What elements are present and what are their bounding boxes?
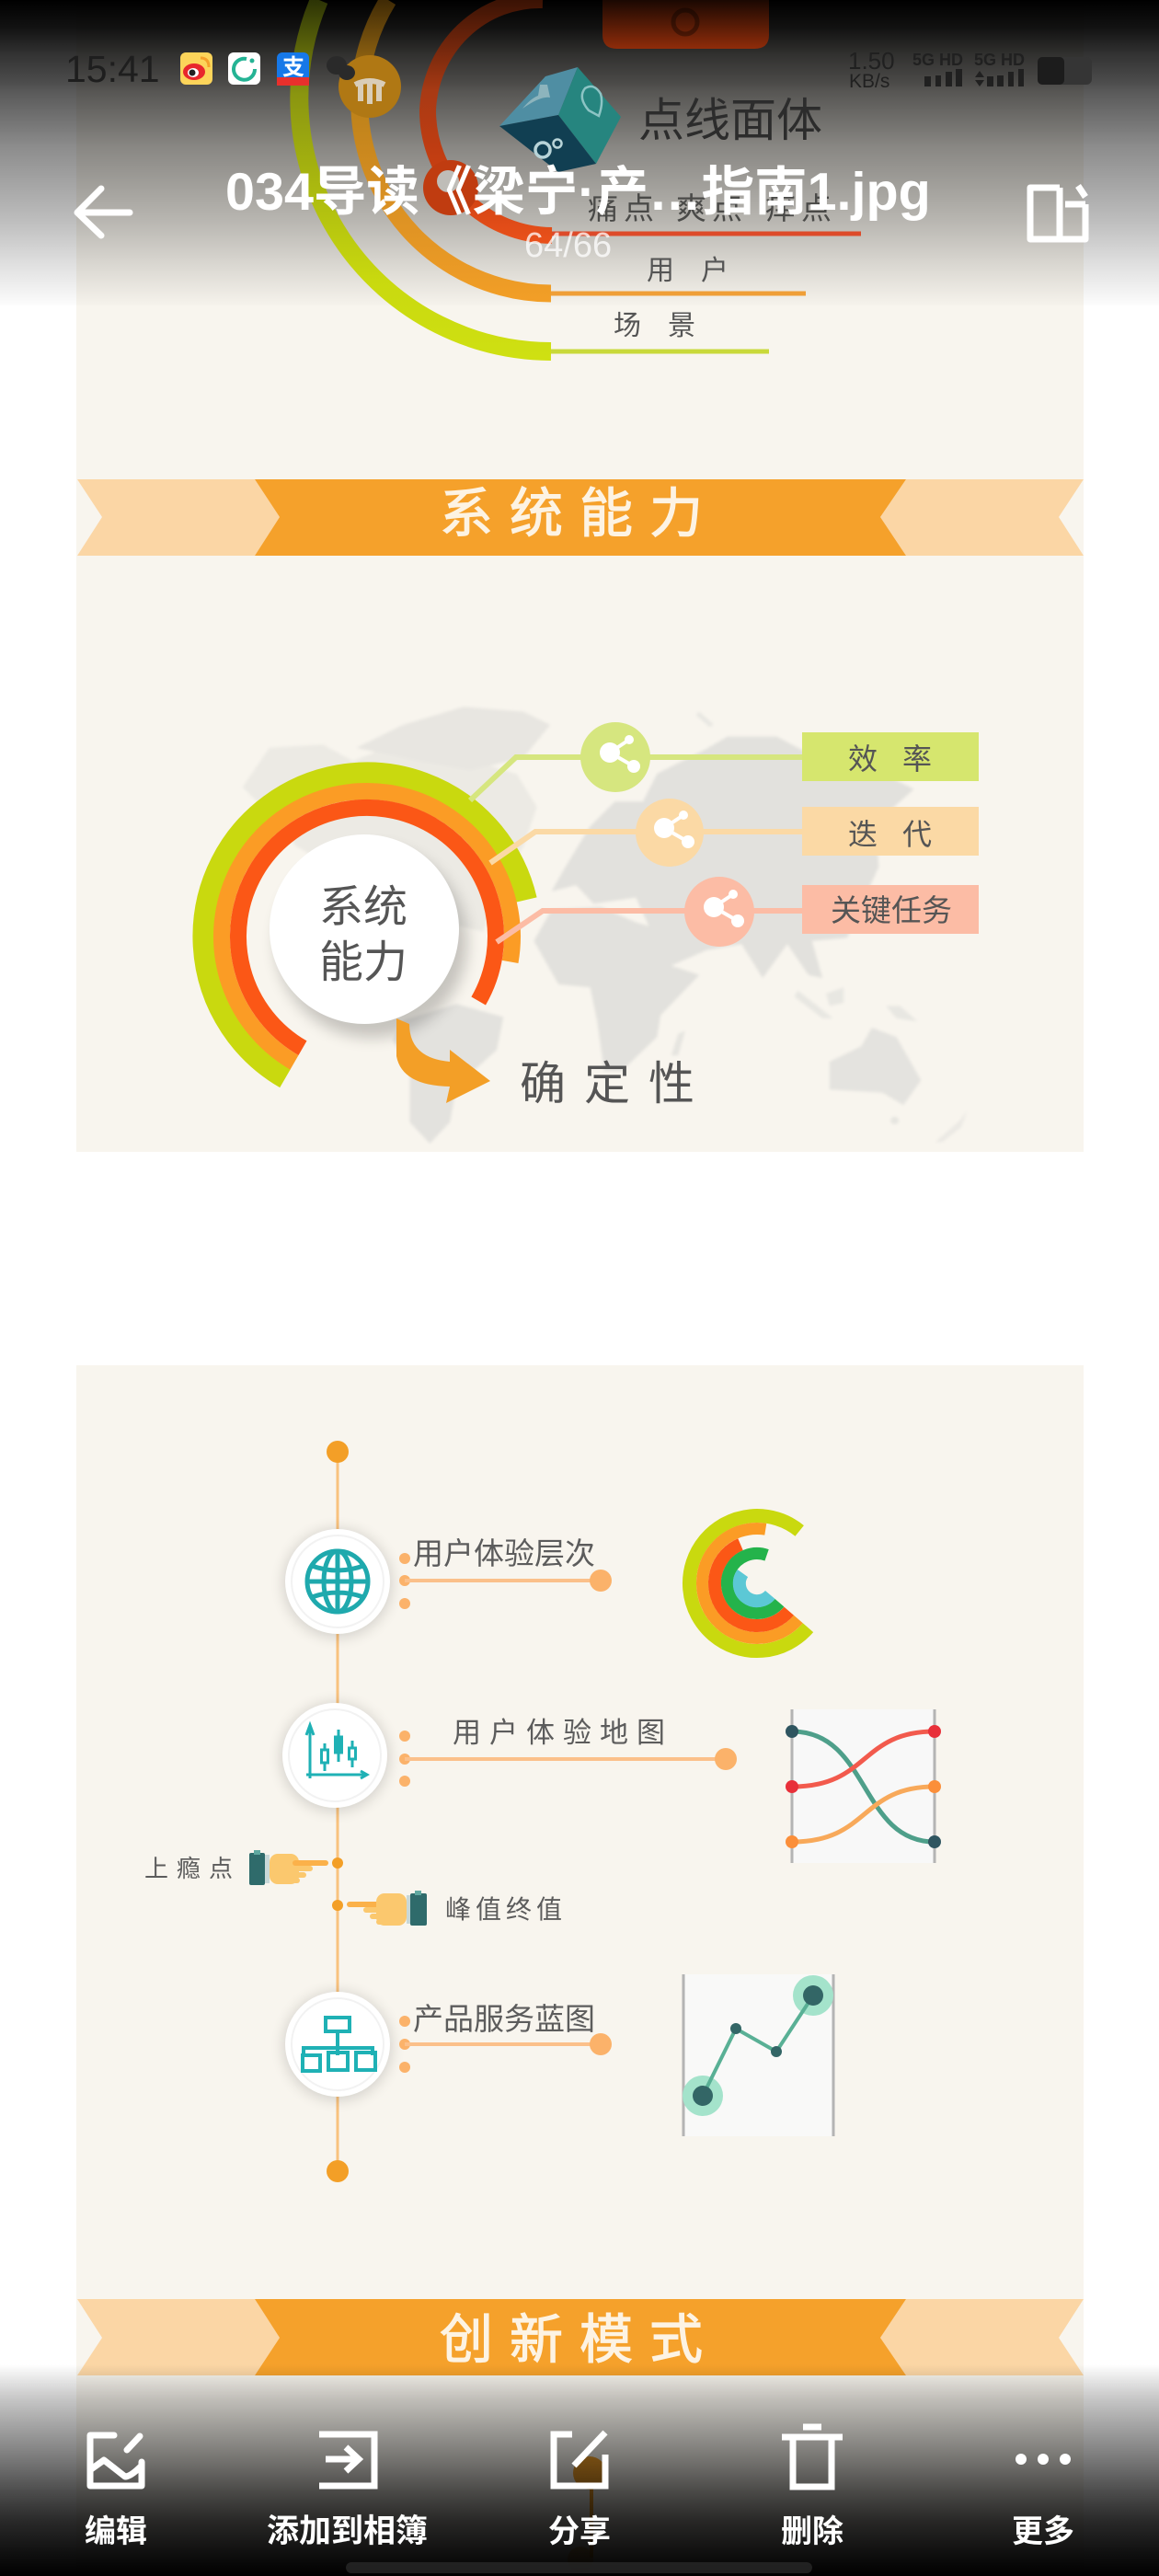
- node: orange curve: [339, 55, 401, 118]
- tag: 效率: [802, 732, 979, 781]
- central circle: 系统能力: 系统: [319, 883, 407, 932]
- banner: 系统能力: [77, 479, 1084, 556]
- callout: 上瘾点 with pointing hand: [144, 1850, 343, 1885]
- connector lines to labels: [470, 757, 802, 942]
- status bar: [65, 47, 1092, 92]
- central circle: 系统能力: [270, 834, 467, 1038]
- banner: 创新模式: 创新模式: [440, 2310, 719, 2370]
- status: time: 15:41: [65, 48, 160, 90]
- row: 用户体验层次: [399, 1536, 612, 1609]
- chart: line chart: [683, 1974, 833, 2136]
- icon: alipay app: 支: [282, 55, 304, 80]
- row: 用户体验层次: 用户体验层次: [413, 1536, 595, 1570]
- status: network speed: KB/s: [849, 71, 889, 92]
- status: network speed: [848, 47, 895, 92]
- node: globe icon: [284, 1529, 391, 1637]
- status: network speed: 1.50: [848, 47, 895, 75]
- heading: 点线面体: 点线面体: [638, 95, 822, 146]
- header: back arrow: [77, 189, 130, 236]
- status: signal: [912, 51, 1025, 86]
- node: orange share icon: [636, 799, 704, 867]
- icon: cube: [499, 67, 621, 172]
- label: 痛点 爽点 痒点: 痛点: [588, 191, 660, 225]
- home indicator: [346, 2562, 812, 2573]
- tag: 关键任务: 关键任务: [831, 893, 952, 927]
- tool: delete: 删除: [781, 2514, 843, 2549]
- label: 痛点 爽点 痒点: [588, 191, 837, 225]
- tool: share: [548, 2432, 611, 2549]
- label: 痛点 爽点 痒点: 爽点: [676, 191, 748, 225]
- panel: lower infographic page: [76, 1365, 1084, 2576]
- central circle: 系统能力: 能力: [319, 938, 407, 987]
- tag: 迭代: [802, 807, 979, 856]
- header: file title: 034导读《梁宁·产…指南1.jpg: [225, 163, 931, 222]
- row: 产品服务蓝图: [399, 2002, 612, 2073]
- overlay: bottom gradient: [0, 2364, 1159, 2576]
- tag: 迭代: 迭代: [848, 818, 957, 851]
- chart: three concentric curves: [299, 0, 861, 351]
- node: red share icon: [684, 877, 754, 947]
- timeline continuation under toolbar: [568, 2456, 606, 2572]
- callout: 峰值终值 with pointing hand: 峰值终值: [445, 1895, 567, 1924]
- label: 场景: 场景: [614, 311, 722, 341]
- icon: wechat: [327, 56, 355, 80]
- node: red curve: [423, 160, 478, 215]
- icon: alipay app: [277, 52, 309, 86]
- status: signal: 5G HD: [974, 51, 1025, 69]
- chart: bump chart: [786, 1709, 941, 1863]
- banner: 系统能力: 系统能力: [440, 484, 719, 544]
- node: green share icon: [580, 722, 650, 792]
- chart: layered ring C: [689, 1516, 808, 1651]
- header: side panel icon: [1030, 186, 1085, 239]
- tool: edit: [85, 2435, 147, 2549]
- node: org chart icon: [284, 1992, 391, 2099]
- icon: circle app: [228, 52, 260, 85]
- label: 用户: 用户: [647, 256, 755, 286]
- tool: edit: 编辑: [85, 2514, 147, 2549]
- callout: 上瘾点 with pointing hand: 上瘾点: [144, 1855, 241, 1882]
- world map background: [243, 707, 967, 1144]
- chart: system capability rings: [203, 773, 526, 1078]
- tool: more: 更多: [1012, 2514, 1074, 2549]
- tag: 效率: 效率: [848, 742, 957, 776]
- tool: delete: [781, 2427, 843, 2549]
- status: battery: [1038, 57, 1092, 85]
- status: signal: 5G HD: [912, 51, 963, 69]
- banner: 创新模式: [77, 2299, 1084, 2375]
- label: 痛点 爽点 痒点: 痒点: [765, 191, 837, 225]
- row: 用户体验地图: [399, 1717, 737, 1787]
- overlay: top gradient: [0, 0, 1159, 305]
- tag: 关键任务: [802, 885, 979, 934]
- tool: more: [1012, 2454, 1074, 2549]
- header: page counter: 64/66: [524, 226, 612, 265]
- tool: add to album: [267, 2434, 428, 2549]
- arrow to 确定性: [396, 1018, 490, 1103]
- callout: 峰值终值 with pointing hand: [332, 1891, 567, 1926]
- timeline spine: [327, 1441, 349, 2182]
- panel: upper infographic page: [76, 0, 1084, 1152]
- tool: add to album: 添加到相簿: [267, 2513, 428, 2549]
- toolbar: [85, 2427, 1074, 2549]
- tool: share: 分享: [548, 2514, 611, 2549]
- icon: red tab at top: [602, 0, 769, 49]
- node: candlestick chart icon: [281, 1703, 388, 1811]
- row: 产品服务蓝图: 产品服务蓝图: [413, 2002, 595, 2036]
- row: 用户体验地图: 用户体验地图: [453, 1717, 673, 1749]
- icon: weibo app: [180, 52, 212, 85]
- label: 确定性: 确定性: [520, 1058, 713, 1110]
